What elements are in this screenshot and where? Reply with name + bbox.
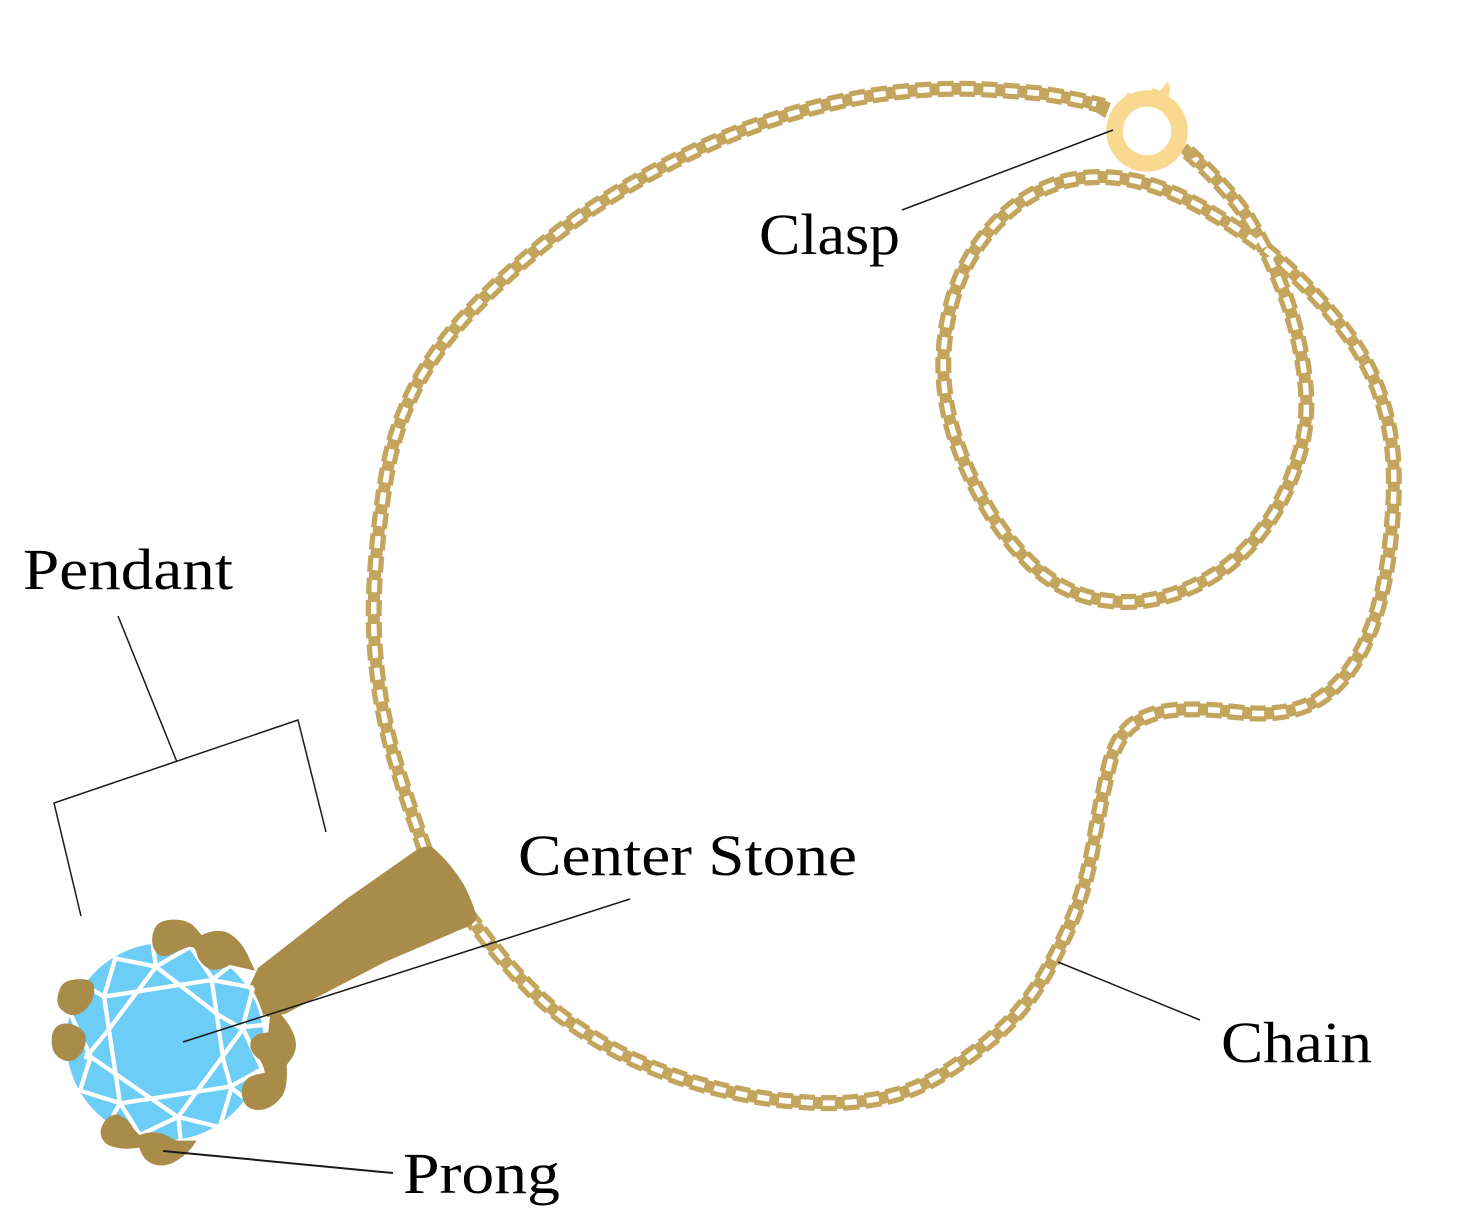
label: center stone: Center Stone [518, 823, 857, 888]
prong: lower left [52, 1023, 86, 1061]
label: prong: Prong [403, 1141, 560, 1206]
clasp [1094, 81, 1199, 164]
prong: bottom [101, 1114, 197, 1165]
prong: right [242, 1012, 296, 1110]
leader lines [54, 130, 1200, 1173]
label: clasp: Clasp [759, 202, 900, 267]
pendant bail [250, 846, 477, 1020]
label: pendant: Pendant [23, 537, 233, 602]
prongs [52, 920, 296, 1165]
label: chain: Chain [1221, 1010, 1372, 1075]
chain [374, 89, 1394, 1103]
center stone [63, 940, 267, 1143]
prong: upper left [57, 979, 94, 1015]
prong: top [152, 920, 255, 971]
